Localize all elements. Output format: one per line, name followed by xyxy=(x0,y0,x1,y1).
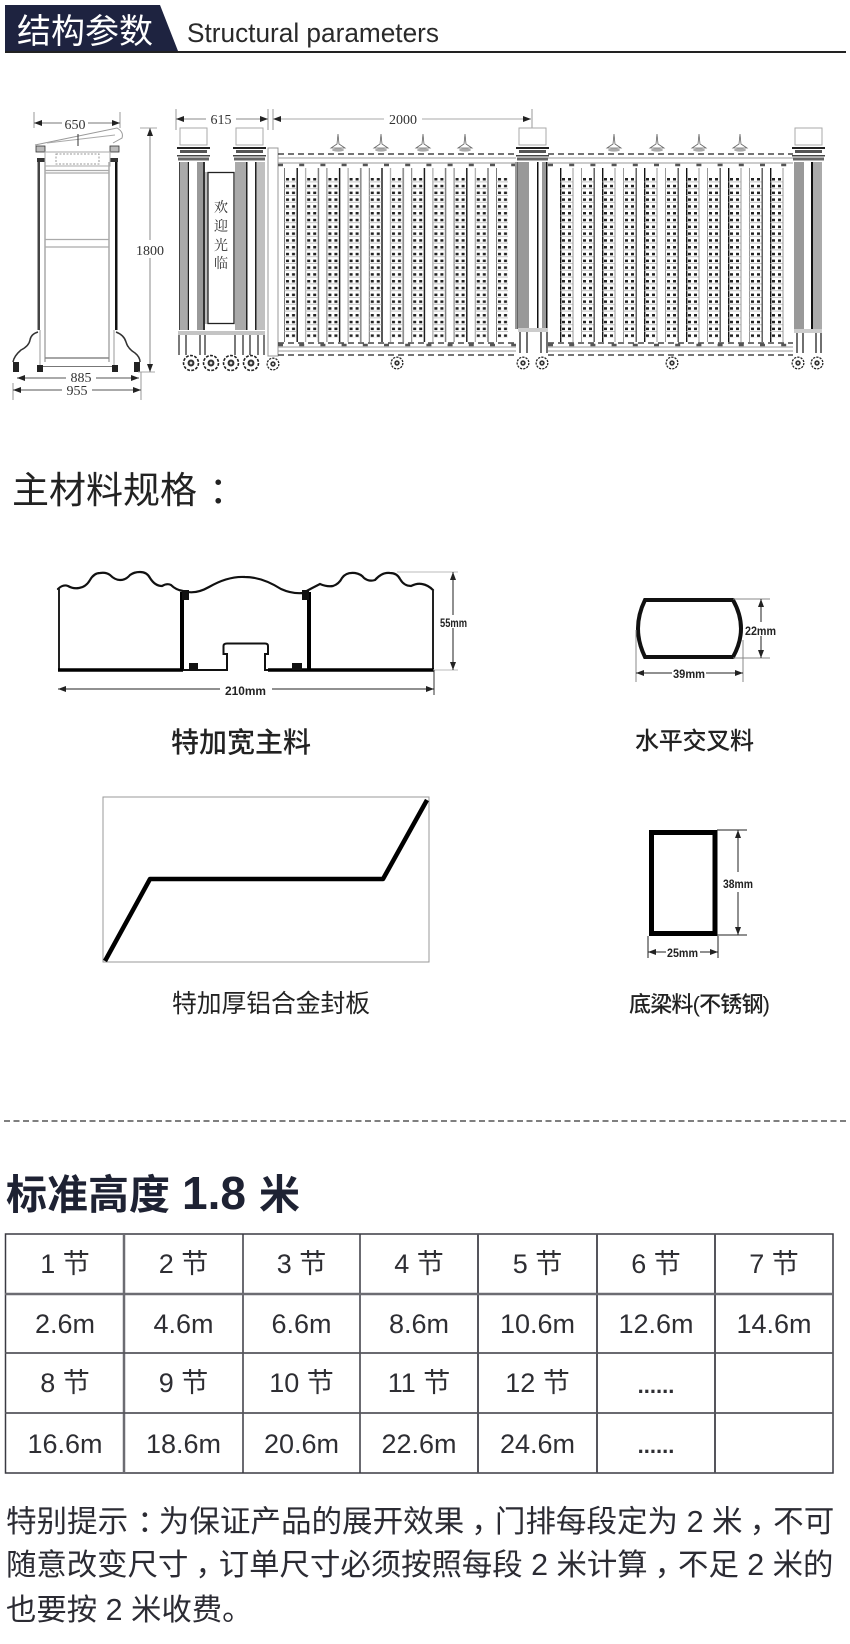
row 4: lengths: ...... xyxy=(638,1433,674,1458)
welcome sign panel: 迎 xyxy=(214,216,228,236)
row 4: lengths: 24.6m xyxy=(500,1429,575,1459)
note: special reminder xyxy=(6,1505,834,1627)
caption: extra thick aluminium seal plate: 特加厚铝合金封板 xyxy=(172,990,370,1018)
note: special reminder: 特别提示 ：为保证产品的展开效果，门排每段定为 2 米，不可 xyxy=(6,1505,834,1539)
English heading: Structural parameters xyxy=(187,18,439,48)
dimension 55mm: 55mm xyxy=(440,616,467,630)
header tab xyxy=(5,5,178,51)
dimension 25mm: 25mm xyxy=(667,946,698,960)
caption: extra wide main material: 特加宽主料 xyxy=(171,727,311,758)
gate section two xyxy=(560,168,784,342)
dimension 39mm: 39mm xyxy=(673,667,705,681)
control cabin xyxy=(177,128,278,356)
end post xyxy=(792,128,825,353)
row 1: sections: 3 节 xyxy=(277,1249,326,1279)
profile: bottom beam stainless steel xyxy=(648,830,753,960)
dimension 55mm xyxy=(397,572,467,670)
row 4: lengths: 18.6m xyxy=(146,1429,221,1459)
header rule xyxy=(5,51,846,53)
gate section one xyxy=(284,168,508,342)
profile: horizontal cross member xyxy=(636,599,776,682)
row 1: sections: 6 节 xyxy=(631,1249,681,1279)
caption: bottom beam stainless steel: 底梁料(不锈钢) xyxy=(629,992,770,1017)
middle post xyxy=(515,128,549,353)
welcome sign panel: 光 xyxy=(214,235,228,255)
side view drawing of gate xyxy=(13,112,164,400)
cabin wheels xyxy=(184,356,279,370)
dimension 22mm: 22mm xyxy=(745,624,776,638)
dimension 2000: 2000 xyxy=(389,113,417,128)
dimension 650: 650 xyxy=(64,118,86,133)
rails xyxy=(278,154,793,355)
dimension 615 xyxy=(176,109,268,130)
row 3: sections: 8 节 xyxy=(40,1368,90,1398)
row 3: sections: 10 节 xyxy=(269,1368,334,1398)
Chinese heading: 结构参数 xyxy=(17,13,153,51)
welcome sign panel: 欢 xyxy=(214,197,228,217)
profile: extra thick aluminium seal plate xyxy=(103,797,429,962)
heading: standard height 1.8 m: 标准高度 1.8 米 xyxy=(6,1167,300,1219)
table: section count and length xyxy=(5,1234,833,1473)
wave outline xyxy=(58,572,433,593)
dimension 955: 955 xyxy=(66,384,88,399)
welcome sign panel xyxy=(208,172,234,324)
row 2: lengths: 12.6m xyxy=(618,1309,694,1339)
row 2: lengths: 2.6m xyxy=(35,1309,95,1339)
dimension 1800: 1800 xyxy=(136,244,164,259)
side view wheels xyxy=(13,362,140,372)
row 1: sections: 1 节 xyxy=(40,1249,90,1279)
gate wheels xyxy=(391,357,823,369)
dimension 885: 885 xyxy=(70,371,92,386)
dimension 615: 615 xyxy=(210,113,232,128)
section header: structural parameters xyxy=(5,5,846,53)
row 2: lengths: 6.6m xyxy=(271,1309,332,1339)
dimension 955 xyxy=(13,372,141,400)
row 1: sections: 7 节 xyxy=(749,1249,799,1279)
row 3: sections: 11 节 xyxy=(388,1368,450,1398)
welcome sign panel: 临 xyxy=(214,253,228,273)
row 1: sections xyxy=(40,1249,799,1279)
row 3: sections xyxy=(40,1368,674,1398)
row 3: sections: 12 节 xyxy=(505,1368,570,1398)
row 3: sections: 9 节 xyxy=(159,1368,208,1398)
row 3: sections: ...... xyxy=(638,1373,674,1398)
row 1: sections: 2 节 xyxy=(159,1249,208,1279)
profile: extra wide main material xyxy=(58,572,467,698)
row 2: lengths: 14.6m xyxy=(736,1309,812,1339)
row 1: sections: 5 节 xyxy=(513,1249,562,1279)
note: special reminder: 也要按 2 米收费。 xyxy=(6,1593,253,1627)
dimension 38mm: 38mm xyxy=(723,877,753,891)
dimension 2000 xyxy=(273,109,532,130)
side view body xyxy=(13,128,140,367)
finials xyxy=(331,134,747,152)
note: special reminder: 随意改变尺寸，订单尺寸必须按照每段 2 米计算，不足 2 米的 xyxy=(6,1548,833,1582)
row 4: lengths: 20.6m xyxy=(264,1429,339,1459)
heading: main material specifications: 主材料规格 ： xyxy=(12,470,246,511)
row 4: lengths: 16.6m xyxy=(27,1429,103,1459)
row 2: lengths: 8.6m xyxy=(389,1309,449,1339)
row 2: lengths: 10.6m xyxy=(500,1309,575,1339)
dimension 650 xyxy=(34,112,120,133)
front view drawing of gate xyxy=(176,109,825,370)
walls and base xyxy=(59,589,433,670)
table grid xyxy=(5,1234,833,1473)
row 4: lengths xyxy=(27,1429,674,1459)
row 4: lengths: 22.6m xyxy=(381,1429,457,1459)
dimension 885 xyxy=(17,371,139,386)
caption: horizontal cross member: 水平交叉料 xyxy=(635,728,754,755)
row 2: lengths xyxy=(35,1309,812,1339)
dimension 1800 xyxy=(136,128,164,372)
row 2: lengths: 4.6m xyxy=(153,1309,214,1339)
dimension 210mm: 210mm xyxy=(225,684,266,698)
row 1: sections: 4 节 xyxy=(394,1249,444,1279)
